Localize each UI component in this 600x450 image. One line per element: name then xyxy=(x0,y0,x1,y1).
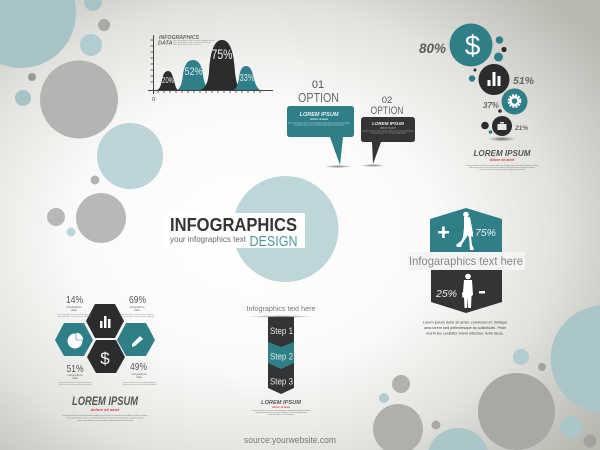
stat 51% xyxy=(58,363,92,386)
hexagon stats: Lorem ipsum dolor sit amet consectetur adipiscing elit sed do eiusmod xyxy=(77,419,133,422)
option 02 heading: 02 xyxy=(382,95,392,106)
speech bubble options: Lorem ipsum dolor sit amet consectetur adipiscing elit sed do eiusmod xyxy=(294,124,344,126)
stat 49%: data xyxy=(136,375,142,379)
stat 14%: data xyxy=(71,308,77,312)
hexagon stats: Lorem ipsum dolor sit amet consectetur adipiscing elit sed do eiusmod tempor incididunt ut labore et dolore xyxy=(62,414,148,417)
area chart xyxy=(148,35,273,103)
stat 14%: Lorem ipsum dolor sit amet consectetur adipiscing xyxy=(57,315,91,318)
design word: DESIGN xyxy=(250,233,298,250)
stat 69%: Lorem ipsum dolor sit amet consectetur adipiscing xyxy=(120,315,154,318)
speech bubble options: Lorem ipsum dolor sit amet consectetur adipiscing elit sed do eiusmod tempor xyxy=(362,130,414,132)
speech bubble options: LOREM IPSUM xyxy=(300,112,339,118)
hexagon: dollar: $ xyxy=(100,349,110,368)
hexagon: pie xyxy=(55,323,93,356)
option 02 bubble xyxy=(361,117,415,164)
stat 14%: infographics xyxy=(66,305,82,309)
speech bubble options: Lorem ipsum dolor sit amet consectetur adipiscing elit xyxy=(370,132,406,134)
description: Lorem ipsum dolor sit amet, commodo et, tristique xyxy=(423,320,507,324)
option 01 heading: 01 xyxy=(312,79,324,91)
decorative circles: top left xyxy=(0,0,163,243)
dark ribbon body xyxy=(268,317,294,394)
step ribbon: Lorem ipsum dolor sit amet consectetur adipiscing elit sed do eiusmod tempor xyxy=(255,411,307,414)
hexagon stats xyxy=(55,294,156,422)
stat 51%: 51% xyxy=(66,363,84,375)
option 01 shadow xyxy=(324,165,352,168)
peak 52% xyxy=(177,60,210,90)
source line: source:yourwebsite.com xyxy=(244,435,336,446)
hexagon stats: dolore sit amet xyxy=(91,407,120,412)
stat 80%: 80% xyxy=(419,40,447,56)
ribbon top shadow xyxy=(248,315,314,318)
minus sign xyxy=(479,291,485,294)
chart axes xyxy=(148,35,273,94)
stat 69% xyxy=(120,294,154,318)
stat 69%: data xyxy=(134,308,140,312)
plus sign xyxy=(438,226,449,238)
central title xyxy=(165,176,338,282)
step ribbon xyxy=(246,306,316,416)
step ribbon: Step 2 xyxy=(270,352,293,362)
area chart: 0 xyxy=(152,97,155,103)
speech bubble options: dolore sit amet xyxy=(380,126,396,130)
gender comparison panel: urna lorem sed pellentesque ac sollicitudin. Pede xyxy=(424,326,506,330)
option 02 shadow xyxy=(361,164,385,167)
icon: bars circle xyxy=(478,64,510,95)
white title plate xyxy=(165,213,305,248)
caption: LOREM IPSUM xyxy=(72,396,138,408)
step ribbon: Step 3 xyxy=(270,376,293,386)
shadow xyxy=(488,136,516,142)
speech bubble options: OPTION xyxy=(370,105,404,117)
stat 14%: 14% xyxy=(66,294,83,306)
icon: dollar circle: $ xyxy=(465,30,481,61)
hexagon: pencil xyxy=(117,323,155,356)
speech bubble options: dolore sit amet xyxy=(310,118,328,121)
dark hexagon half xyxy=(431,270,502,313)
stat 25%: 25% xyxy=(435,289,457,300)
stat 69%: infographics xyxy=(129,305,145,309)
step ribbon: dolore sit amet xyxy=(272,406,290,409)
icon: man silhouette xyxy=(462,274,473,308)
area chart: 33% xyxy=(240,73,255,84)
ribbon heading: Infographics text here xyxy=(246,306,316,313)
stat 69%: 69% xyxy=(129,294,146,306)
speech bubble options xyxy=(287,79,415,168)
ribbon caption: LOREM IPSUM xyxy=(261,400,301,406)
gender comparison panel: Infogaraphics text here xyxy=(409,254,523,268)
bubble stats: Lorem ipsum dolor sit amet consectetur adipiscing elit sed do xyxy=(479,168,525,171)
stat 51%: Lorem ipsum dolor sit amet consectetur adipiscing xyxy=(58,383,92,386)
stat 51%: Lorem ipsum dolor sit amet consectetur adipiscing xyxy=(58,381,92,384)
area chart: 75% xyxy=(212,46,232,62)
speech bubble options: OPTION xyxy=(298,90,339,105)
stat 51%: infographics xyxy=(67,373,83,377)
icon: dollar circle xyxy=(450,24,492,66)
large teal circle xyxy=(232,176,338,282)
stat 21%: 21% xyxy=(514,126,529,132)
stat 49% xyxy=(122,361,156,386)
caption: LOREM IPSUM xyxy=(474,149,531,158)
stat 14% xyxy=(57,294,91,318)
peak 33% xyxy=(234,66,260,90)
step labels: Step 1 xyxy=(270,326,293,336)
stat 14%: Lorem ipsum dolor sit amet consectetur adipiscing xyxy=(57,313,91,316)
area chart: DATA xyxy=(158,40,172,46)
icon: gear circle xyxy=(502,88,528,114)
speech bubble options: Lorem ipsum dolor sit amet consectetur adipiscing elit sed do eiusmod tempor incididunt xyxy=(288,122,351,124)
stat 69%: Lorem ipsum dolor sit amet consectetur adipiscing xyxy=(120,313,154,316)
stat 37%: 37% xyxy=(483,101,499,110)
hexagon: bars xyxy=(86,304,124,338)
area chart: Lorem ipsum dolor sit amet consectetur xyxy=(173,43,201,46)
chart title: INFOGRAPHICS xyxy=(159,35,199,41)
chart labels: 20% xyxy=(162,76,174,85)
bubble stats: Lorem ipsum dolor sit amet consectetur adipiscing elit sed do eiusmod tempor incididunt ut labore xyxy=(466,164,538,167)
step ribbon: Lorem ipsum dolor sit amet consectetur adipiscing elit sed do eiusmod tempor incididunt xyxy=(252,409,311,412)
small accent dots xyxy=(469,36,507,134)
title: INFOGRAPHICS xyxy=(170,214,297,235)
stat 49%: 49% xyxy=(130,361,147,373)
area chart: Lorem ipsum dolor sit amet consectetur adipiscing elit xyxy=(173,41,211,44)
peak 20% xyxy=(157,71,178,90)
gender comparison panel xyxy=(408,208,525,336)
bubble stats: Lorem ipsum dolor sit amet consectetur adipiscing elit sed do eiusmod tempor incididunt xyxy=(469,166,535,169)
stat 51%: 51% xyxy=(513,75,535,87)
stat 49%: Lorem ipsum dolor sit amet consectetur adipiscing xyxy=(122,381,156,384)
teal step band xyxy=(268,342,294,369)
decorative circles: bottom right xyxy=(373,305,600,450)
bubble stats: dolore sit amet xyxy=(490,158,515,162)
stat 49%: infographics xyxy=(131,372,147,376)
subtitle: your infographics text xyxy=(170,234,247,244)
step ribbon: Lorem ipsum dolor sit amet consectetur xyxy=(268,413,295,416)
icon: woman silhouette xyxy=(456,212,474,250)
teal hexagon half xyxy=(430,208,502,252)
stat 51%: data xyxy=(72,376,78,380)
option 01 bubble xyxy=(287,106,354,165)
stripe with text xyxy=(408,252,525,270)
speech bubble options: LOREM IPSUM xyxy=(372,121,404,126)
peak 75% xyxy=(200,40,241,90)
hexagon stats: Lorem ipsum dolor sit amet consectetur adipiscing elit sed do eiusmod tempor incididunt ut labore xyxy=(66,416,144,420)
bubble stats xyxy=(419,24,538,171)
stat 49%: Lorem ipsum dolor sit amet consectetur adipiscing xyxy=(122,383,156,386)
icon: briefcase circle xyxy=(492,116,512,136)
gender comparison panel: morbi leo curabitur lorem ridiculus. Ante lacus. xyxy=(426,332,504,336)
area chart: 52% xyxy=(184,66,203,78)
area chart: Lorem ipsum dolor sit amet consectetur adipiscing elit sed xyxy=(173,39,214,42)
stat 75%: 75% xyxy=(475,228,496,239)
